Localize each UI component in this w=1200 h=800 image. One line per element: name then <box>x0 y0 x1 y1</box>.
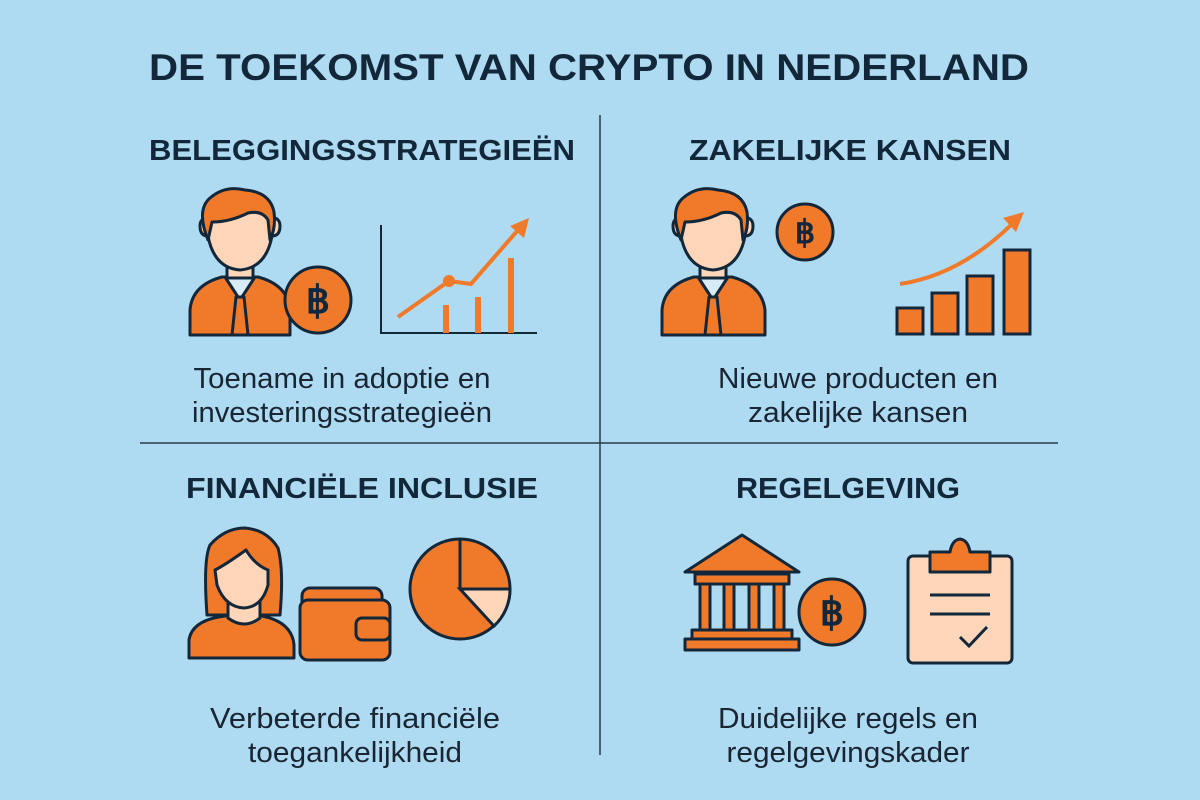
icon: bitcoin coin: ฿ <box>820 592 844 634</box>
text block <box>718 363 998 429</box>
title: DE TOEKOMST VAN CRYPTO IN NEDERLAND <box>149 47 1029 88</box>
heading: beleggingsstrategieen: BELEGGINGSSTRATEGIEËN <box>149 134 575 167</box>
icon: woman <box>189 528 294 658</box>
icon: bitcoin coin <box>799 579 865 645</box>
text block: Duidelijke regels en <box>718 703 978 735</box>
icon: businessman <box>662 189 765 335</box>
icon: bitcoin coin <box>285 267 351 333</box>
heading: financiele inclusie: FINANCIËLE INCLUSIE <box>186 472 538 505</box>
panel: zakelijke kansen <box>662 135 1030 429</box>
heading: zakelijke kansen: ZAKELIJKE KANSEN <box>689 135 1011 167</box>
text block: Nieuwe producten en <box>718 363 998 395</box>
text block <box>210 703 500 769</box>
panel: beleggingsstrategieën <box>149 134 575 429</box>
text block: toegankelijkheid <box>248 737 462 769</box>
panel: regelgeving <box>685 473 1012 769</box>
icon: bitcoin coin: ฿ <box>795 214 815 250</box>
panel: financiële inclusie <box>186 472 538 769</box>
chart: rising line <box>381 218 537 333</box>
icon: bitcoin coin: ฿ <box>306 280 330 322</box>
text block: Verbeterde financiële <box>210 703 500 735</box>
icon: wallet <box>300 588 390 660</box>
text block: Toename in adoptie en <box>194 363 490 395</box>
chart: bar chart growth <box>897 212 1030 334</box>
text block <box>192 363 492 429</box>
icon: clipboard <box>908 539 1012 663</box>
icon: bitcoin coin <box>777 204 833 260</box>
text block: regelgevingskader <box>726 737 970 769</box>
text block <box>718 703 978 769</box>
text block: zakelijke kansen <box>748 397 968 429</box>
icon: bank building <box>685 535 799 650</box>
chart: pie <box>410 539 510 639</box>
heading: regelgeving: REGELGEVING <box>736 473 960 505</box>
text block: investeringsstrategieën <box>192 397 492 429</box>
icon: businessman <box>190 189 290 335</box>
